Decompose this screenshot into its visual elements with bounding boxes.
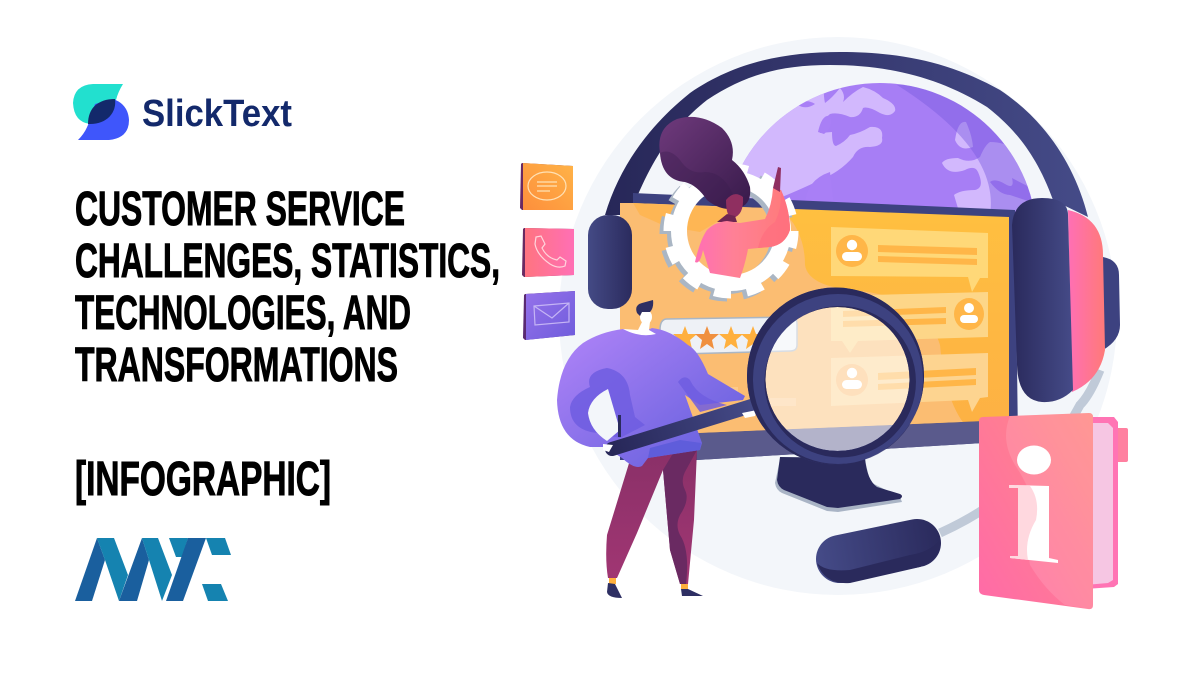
tile: chat (520, 163, 573, 210)
magnifier handle (612, 404, 758, 449)
microphone (817, 540, 940, 583)
left earcup (588, 215, 632, 309)
monitor screen (633, 203, 1009, 440)
title: CUSTOMER SERVICE (75, 182, 405, 236)
monitor (620, 193, 1018, 460)
background circle (559, 37, 1117, 595)
pants (606, 450, 697, 584)
tile: phone (522, 228, 574, 277)
headband (605, 52, 1088, 217)
illustration: customer service scene (520, 37, 1128, 609)
rating card with stars (660, 317, 797, 354)
right earcup (1012, 198, 1120, 402)
contact tiles (520, 163, 575, 340)
man with magnifier (557, 288, 924, 598)
logo: SlickText: SlickText (142, 93, 292, 135)
globe (742, 83, 1032, 212)
logo: MVT (75, 538, 231, 601)
gear and woman (659, 117, 792, 295)
hair (659, 117, 750, 209)
chat bubble 2 (831, 292, 988, 353)
monitor stand (775, 457, 902, 512)
cable (940, 370, 1100, 533)
letter i (1009, 446, 1058, 563)
title: TECHNOLOGIES, AND (75, 286, 411, 340)
woman figure (695, 167, 790, 278)
shoes (607, 578, 703, 598)
title: CHALLENGES, STATISTICS, (75, 234, 500, 288)
sweater (557, 328, 745, 467)
gear (670, 170, 792, 292)
sweater shadow (570, 368, 645, 438)
logo: SlickText (73, 84, 292, 140)
chat bubble 3 (831, 353, 988, 412)
info folder (979, 413, 1128, 609)
magnifier ring (747, 288, 924, 464)
tile: mail (523, 291, 575, 340)
man head (623, 300, 656, 335)
title: TRANSFORMATIONS (75, 338, 398, 392)
magnifier lens (766, 307, 910, 451)
chat bubble 1 (831, 227, 988, 292)
subtitle: infographic tag: [INFOGRAPHIC] (75, 452, 331, 506)
title (75, 182, 500, 392)
arm gap (588, 389, 620, 441)
